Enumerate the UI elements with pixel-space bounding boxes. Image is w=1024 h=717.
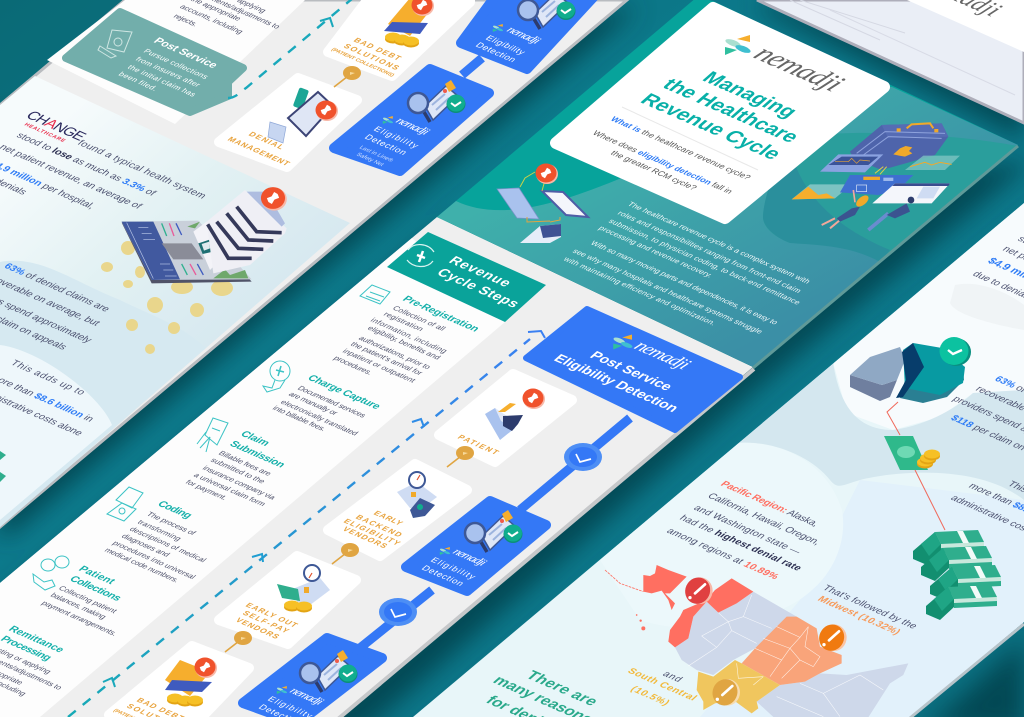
- icon: red alert: [681, 573, 714, 608]
- heading: many reasons for denials: There are: [522, 668, 602, 709]
- text: eligibility detection: Detection: [473, 41, 519, 64]
- label: early backend eligibility vendors: [340, 509, 406, 550]
- label: early backend eligibility vendors: VENDORS: [340, 525, 390, 550]
- title: the Healthcare: [658, 75, 804, 147]
- text: intro paragraphs: roles and responsibilities ranging from front-end claim: [615, 209, 803, 295]
- label: bad debt solutions: SOLUTIONS: [341, 42, 402, 72]
- text: eligibility detection: Eligibility: [428, 556, 479, 581]
- map: south central region: [697, 660, 780, 713]
- label: early out self-pay vendors: [233, 601, 301, 641]
- text: pacific region: among regions at 10.89%: [664, 527, 781, 582]
- label: bad debt solutions: BAD DEBT: [351, 36, 404, 62]
- left page soft shapes: [0, 260, 133, 527]
- icon: eligibility: [465, 510, 522, 552]
- text: questions: What is the healthcare revenue cycle?: [608, 115, 754, 181]
- text: south central: South Central: [625, 667, 699, 703]
- step: coding: procedures into universal: [110, 539, 198, 581]
- panel: left page: [0, 0, 627, 527]
- step: charge capture: [263, 361, 383, 437]
- step: claim submission: a universal claim form: [191, 471, 268, 508]
- step: pre-registration: procedures.: [331, 354, 375, 376]
- text: eligibility detection: Detection: [419, 564, 466, 588]
- step: claim submission: Submission: [227, 440, 287, 470]
- text: pacific region: had the highest denial rate: [677, 514, 804, 573]
- text: intro paragraphs: see why many hospitals and healthcare systems struggle: [570, 247, 765, 335]
- text: pacific region: and Washington state —: [691, 504, 803, 557]
- icon: medical documents illustration: [497, 164, 588, 243]
- logo: nemadji: [493, 24, 503, 32]
- icon: hospital building: [122, 190, 287, 283]
- logo: nemadji: [383, 116, 393, 124]
- panel: left page infographic section: [0, 76, 350, 527]
- step: claim submission: for payment.: [183, 478, 230, 502]
- icon: clipboard, clock and shield: [397, 472, 437, 518]
- step: coding: transforming: [135, 518, 183, 542]
- card: eligibility detection lower: nemadji: [393, 115, 433, 137]
- text: south central: and: [660, 670, 684, 684]
- panel: right page: [413, 203, 1024, 717]
- icon: pin: [447, 446, 474, 467]
- label: early backend eligibility vendors: BACKEND: [353, 513, 405, 539]
- text: pacific region: [664, 480, 823, 582]
- step: charge capture: Documented services: [295, 384, 368, 419]
- icon: post service hand: [98, 30, 132, 58]
- label: patient: PATIENT: [455, 433, 502, 457]
- text: right page finding: [970, 235, 1024, 302]
- text: change healthcare finding: net patient revenue, an average of: [0, 143, 144, 211]
- logo: nemadji: nemadji: [629, 337, 695, 373]
- step: pre-registration: [331, 285, 481, 384]
- label: denial management: MANAGEMENT: [225, 135, 293, 168]
- map: midwest region: [742, 617, 842, 685]
- label: bad debt solutions: (PATIENT COLLECTIONS): [329, 47, 395, 78]
- map: base states: [675, 592, 797, 675]
- title: Managing: [697, 68, 802, 121]
- text: change healthcare finding: [0, 108, 208, 211]
- panel: post service eligibility detection: [526, 309, 740, 430]
- step: coding: Coding: [155, 500, 194, 521]
- icon: denial: [268, 87, 338, 143]
- icon: folder and card: [165, 658, 217, 706]
- label: bad debt solutions: [111, 696, 187, 717]
- text: remittance end lines: rejects.: [171, 12, 200, 28]
- text: eligibility detection: Eligibility: [483, 34, 528, 57]
- step: pre-registration: the patient's arrival for: [348, 340, 425, 377]
- card: eligibility detection upper: nemadji: [504, 24, 544, 46]
- label: early out self-pay vendors: VENDORS: [233, 616, 282, 641]
- text: eligibility detection: Safety Net: [354, 152, 385, 168]
- icon: orange alert: [815, 620, 848, 655]
- connector: left page blue: [462, 58, 482, 75]
- step: coding: diagnoses and: [119, 532, 172, 558]
- text: post service body: from insurers after: [133, 55, 203, 89]
- icon: claim: [197, 418, 228, 452]
- map: pacific region: [668, 578, 753, 647]
- label: bad debt solutions: [329, 36, 404, 78]
- text: eligibility detection: [473, 34, 528, 64]
- icon: pin: [225, 631, 252, 652]
- icon: banknote and coins: [884, 436, 940, 470]
- card: early backend eligibility vendors: [328, 464, 467, 564]
- card: bad debt solutions top: [328, 0, 470, 87]
- step: charge capture: electronically translated: [278, 398, 360, 437]
- panel: revenue cycle column: [0, 238, 505, 717]
- text: post service body: been filed.: [116, 70, 160, 92]
- logo: nemadji: nemadji: [747, 40, 851, 97]
- icon: money stack fragment: [0, 451, 6, 482]
- heading: post service eligibility detection: Post Service: [587, 348, 677, 393]
- text: intro paragraphs: with maintaining efficiency and optimization.: [561, 255, 718, 327]
- icon: eligibility: [518, 0, 576, 29]
- card: eligibility detection lower: [334, 69, 489, 171]
- text: midwest: That's followed by the: [820, 584, 920, 631]
- text: post service body: [116, 47, 211, 98]
- title: [636, 68, 804, 163]
- icon: coins in hand: [33, 556, 69, 590]
- card: early out self-pay vendors: [219, 556, 356, 652]
- icon: pin: [334, 66, 361, 87]
- text: post service body: the initial claim has: [125, 63, 198, 98]
- text: eligibility detection: Eligibility: [371, 125, 422, 150]
- panel: left column white: [47, 0, 305, 124]
- step: pre-registration: information, including: [368, 316, 449, 355]
- logo: nemadji: [440, 547, 450, 555]
- step: charge capture: into billable fees.: [270, 404, 328, 433]
- step: pre-registration: registration: [381, 310, 426, 333]
- panel: post service: [66, 12, 243, 112]
- card: eligibility detection upper: [461, 0, 600, 69]
- text: intro paragraphs: With so many moving parts and dependencies, it is easy to: [588, 239, 780, 326]
- text: change healthcare finding: stood to lose as much as 3.3% of: [14, 131, 158, 198]
- icon: form: [360, 285, 390, 304]
- step: coding: The process of: [144, 510, 199, 537]
- panel: revenue cycle steps label: [387, 232, 546, 322]
- icon: eligibility: [408, 80, 466, 122]
- logo: change healthcare: HEALTHCARE: [22, 122, 67, 144]
- text: questions: the greater RCM cycle?: [608, 149, 700, 192]
- text: intro paragraphs: submission, to physician coding, to back-end remittance: [606, 217, 803, 306]
- step: coding: descriptions of medical: [127, 525, 209, 564]
- map: united states denial rates: [605, 565, 908, 717]
- text: denied claims stats: [0, 262, 112, 352]
- card: patient: [439, 374, 572, 467]
- text: pacific region: Pacific Region: Alaska,: [718, 480, 821, 529]
- icon: falling coins: [101, 241, 233, 354]
- text: post service body: Pursue collections: [141, 47, 211, 81]
- label: denial management: DENIAL: [246, 130, 287, 151]
- text: pacific region: California, Hawaii, Oregon,: [705, 492, 823, 547]
- step: pre-registration: Pre-Registration: [400, 295, 481, 334]
- logo: change healthcare: CHANGE: [22, 108, 90, 144]
- text: midwest: Midwest (10.32%): [815, 595, 903, 637]
- icon: coding: [107, 487, 143, 521]
- step: remittance processing: [0, 625, 66, 697]
- icon: pin: [332, 543, 359, 564]
- step: patient collections: Patient: [76, 565, 117, 587]
- step: patient collections: [33, 556, 124, 637]
- step: charge capture: are manually or: [286, 390, 340, 417]
- card: eligibility detection center: [406, 501, 546, 591]
- step: patient collections: Collecting patient: [56, 584, 120, 615]
- arrow: connector line through charts: [887, 402, 945, 530]
- icon: money, clipboard, clock and coins: [277, 565, 330, 612]
- icon: folder and card: [384, 0, 434, 48]
- label: early backend eligibility vendors: ELIGIBILITY: [341, 517, 403, 547]
- step: claim submission: [183, 418, 287, 508]
- logo: nemadji: [277, 686, 287, 694]
- icon: hospital medical badge: [261, 187, 287, 211]
- text: eligibility detection: Detection: [362, 133, 409, 157]
- title: Revenue Cycle: [636, 90, 786, 163]
- heading: revenue cycle steps: Cycle Steps: [434, 265, 524, 310]
- text: eligibility detection: [419, 556, 479, 588]
- text: eligibility detection: [354, 125, 422, 168]
- heading: post service: Post Service: [151, 36, 220, 70]
- text: eligibility detection: Last in Line®: [357, 145, 395, 164]
- text: administrative cost: [0, 359, 96, 438]
- step: charge capture: Charge Capture: [305, 374, 383, 411]
- step: claim submission: Billable fees are: [216, 449, 274, 477]
- text: intro paragraphs: The healthcare revenue cycle is a complex system with: [625, 200, 813, 285]
- text: questions: Where does eligibility detection fall in: [590, 129, 736, 195]
- card: eligibility detection center: nemadji: [450, 546, 490, 568]
- step: pre-registration: Collection of all: [390, 304, 448, 332]
- heading: revenue cycle steps: Revenue: [446, 253, 516, 289]
- card: eligibility detection bottom: nemadji: [287, 685, 327, 707]
- step: claim submission: Claim: [238, 430, 272, 448]
- arrow: center timeline: [68, 331, 545, 717]
- card: bad debt solutions bottom: [109, 646, 249, 717]
- label: early backend eligibility vendors: EARLY: [371, 509, 406, 527]
- text: administrative cost: This adds up to: [8, 359, 88, 397]
- step: patient collections: Collections: [67, 575, 124, 603]
- text: denied claims stats: 63% of denied claims are: [1, 262, 112, 314]
- icon: patient: [485, 388, 545, 440]
- heading: post service eligibility detection: Eligibility Detection: [551, 351, 683, 414]
- text: intro paragraphs: processing and revenue recovery.: [596, 224, 715, 279]
- panel: header teal: [437, 0, 1018, 368]
- label: early out self-pay vendors: EARLY OUT: [243, 601, 301, 629]
- text: remittance end lines: [171, 0, 282, 35]
- icon: medical kit and people illustration: [792, 123, 960, 230]
- card: denial management: [219, 78, 357, 168]
- step: claim submission: submitted to the: [208, 456, 267, 485]
- panel: top right page: [757, 0, 1024, 123]
- step: pre-registration: authorizations, prior to: [356, 334, 433, 371]
- text: right page stats: [948, 375, 1024, 468]
- arrow: left page timeline: [228, 0, 353, 98]
- icon: timeline node upper: [564, 443, 602, 471]
- step: coding: medical code numbers.: [102, 546, 182, 584]
- icon: charge: [263, 361, 290, 392]
- step: claim submission: insurance company via: [200, 464, 278, 501]
- card: eligibility detection bottom: [243, 638, 382, 717]
- step: patient collections: balances, making: [48, 591, 108, 621]
- icon: cycle arrows: [407, 245, 434, 267]
- step: coding: [102, 487, 209, 584]
- step: patient collections: payment arrangements.: [39, 599, 119, 637]
- step: pre-registration: inpatient or outpatient: [340, 347, 418, 384]
- text: south central: (10.5%): [628, 685, 672, 708]
- chart: pie chart with badge: [850, 337, 971, 403]
- panel: white title card: [556, 8, 884, 218]
- step: remittance processing: Remittance: [6, 625, 66, 655]
- text: intro paragraphs: [561, 200, 813, 335]
- label: early out self-pay vendors: SELF-PAY: [240, 609, 292, 635]
- icon: eligibility: [300, 650, 358, 692]
- icon: timeline node lower: [379, 598, 417, 626]
- step: pre-registration: eligibility, benefits and: [365, 324, 443, 361]
- icon: yellow alert: [708, 675, 742, 710]
- icon: money stack: [913, 530, 1001, 620]
- connector: center timeline blue: [345, 418, 630, 660]
- text: remittance end lines: accounts, including: [178, 3, 245, 35]
- text: change healthcare finding: found a typical health system: [75, 139, 208, 201]
